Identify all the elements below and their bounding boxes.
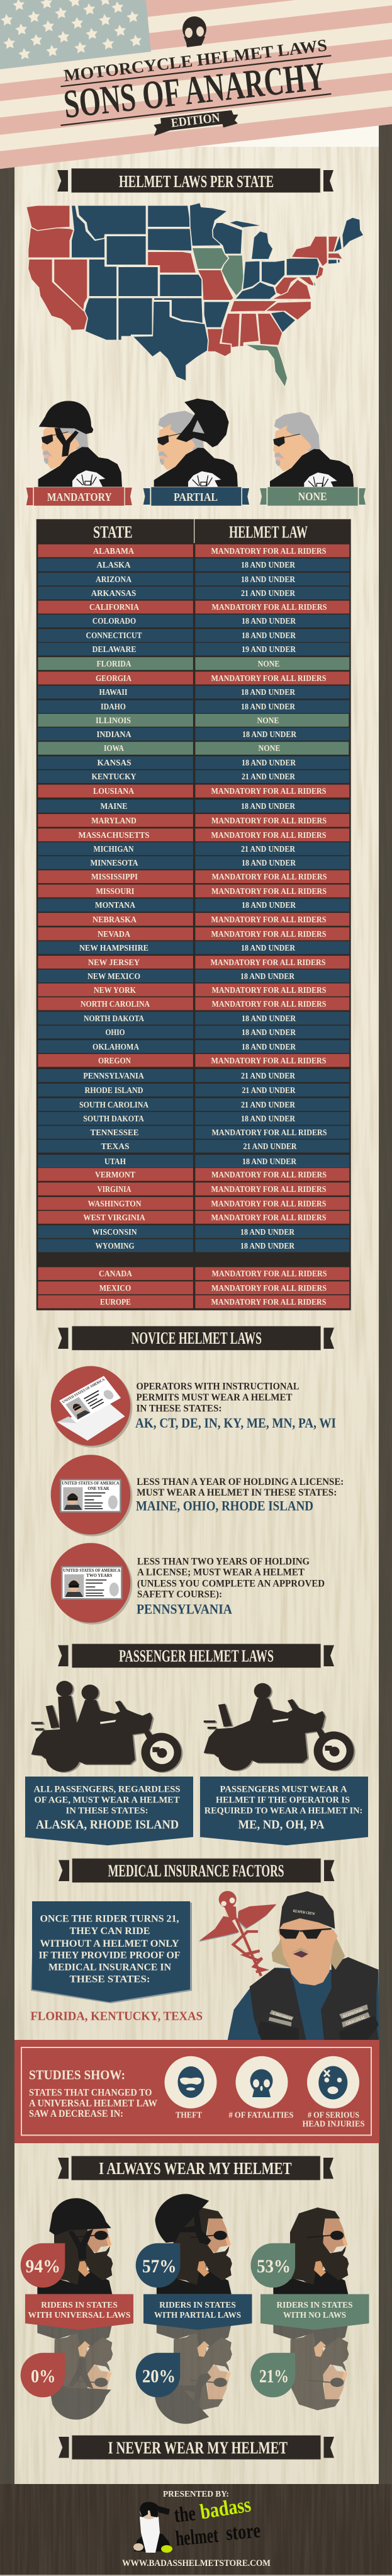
row: Florida	[38, 657, 349, 670]
panel: studies show: HEAD INJURIES	[302, 2119, 365, 2129]
text: instructional permits	[135, 1382, 336, 1431]
row: Indiana	[38, 728, 349, 741]
row: New York: NEW YORK	[94, 985, 136, 995]
row: Montana: MONTANA	[95, 900, 135, 910]
title: MOTORCYCLE HELMET LAWS	[63, 35, 328, 85]
circle: two year license card	[51, 1543, 132, 1625]
row: Arizona: ARIZONA	[96, 575, 132, 584]
row: Mississippi: MISSISSIPPI	[91, 872, 138, 881]
text: less than a year: MAINE, OHIO, RHODE ISLAND	[136, 1498, 313, 1514]
callout: medical insurance: THEY CAN RIDE	[69, 1926, 150, 1937]
row: North Carolina: NORTH CAROLINA	[81, 999, 150, 1009]
row: New Hampshire: NEW HAMPSHIRE	[79, 943, 148, 953]
figure: biker with cap and vest	[228, 1891, 379, 2040]
logo: the badass helmet store: store	[225, 2519, 261, 2545]
row: Vermont	[38, 1168, 349, 1181]
row: Georgia: MANDATORY FOR ALL RIDERS	[211, 673, 326, 683]
row: Oklahoma	[38, 1040, 349, 1053]
stat: 21%	[250, 2353, 295, 2397]
banner: helmet laws per state	[57, 168, 333, 193]
table frame and header	[36, 519, 351, 1310]
row: Indiana: INDIANA	[97, 730, 132, 739]
row: Idaho: IDAHO	[101, 702, 126, 711]
logo: the badass helmet store	[133, 2493, 261, 2553]
row: Kansas: KANSAS	[97, 758, 131, 767]
figure: biker with cap and vest: V. PRESIDENT	[272, 2012, 293, 2022]
row: Illinois: NONE	[257, 716, 279, 725]
row: Maine: MAINE	[101, 801, 127, 811]
circle: one year license card	[51, 1455, 132, 1537]
row: Oregon: OREGON	[98, 1056, 131, 1065]
row: Kansas	[38, 756, 349, 769]
row: Rhode Island: 21 AND UNDER	[242, 1085, 296, 1095]
banner: i never wear my helmet	[59, 2436, 334, 2459]
banner: medical insurance factors	[59, 1858, 335, 1882]
ribbon: none: NONE	[298, 490, 327, 503]
row: New Jersey	[38, 956, 349, 969]
row: Rhode Island: RHODE ISLAND	[84, 1085, 143, 1095]
row: Washington: MANDATORY FOR ALL RIDERS	[211, 1199, 326, 1208]
row: Colorado: 18 AND UNDER	[242, 616, 296, 626]
row: Iowa: NONE	[258, 743, 281, 753]
callout: medical insurance: ONCE THE RIDER TURNS 21,	[40, 1914, 179, 1925]
callout: operator required: REQUIRED TO WEAR A HELMET IN:	[204, 1806, 362, 1816]
ribbon: riders in states with no laws: WITH NO LAWS	[283, 2311, 346, 2320]
text: less than two years	[137, 1556, 325, 1617]
callout: operator required: HELMET IF THE OPERATOR IS	[216, 1795, 350, 1805]
stat: 94%	[21, 2243, 65, 2287]
row: Pennsylvania	[38, 1069, 349, 1082]
row: Maine: 18 AND UNDER	[241, 801, 295, 811]
callout: operator required: PASSENGERS MUST WEAR A	[220, 1784, 347, 1794]
stat: 53%: 53%	[257, 2256, 291, 2277]
row: Colorado	[38, 615, 349, 627]
banner: helmet laws per state: HELMET LAWS PER STATE	[119, 172, 274, 191]
panel: studies show: STATES THAT CHANGED TO	[29, 2088, 152, 2098]
row: Illinois	[38, 714, 349, 727]
text: less than two years: LESS THAN TWO YEARS OF HOLDING	[137, 1556, 310, 1567]
callout: all passengers: OF AGE, MUST WEAR A HELMET	[34, 1795, 180, 1805]
icon: motorcycle with passenger	[31, 1681, 182, 1773]
row: Wyoming: 18 AND UNDER	[240, 1241, 294, 1251]
row: Tennessee: TENNESSEE	[91, 1128, 138, 1137]
logo: the badass helmet store: helmet	[174, 2524, 220, 2551]
row: Oklahoma: 18 AND UNDER	[242, 1042, 296, 1051]
ribbon: riders in states with universal laws: RIDERS IN STATES	[41, 2301, 118, 2310]
row: Florida: NONE	[258, 659, 279, 668]
row: Mexico	[38, 1281, 349, 1294]
text: less than a year: MUST WEAR A HELMET IN THESE STATES:	[137, 1487, 337, 1498]
row: Minnesota	[38, 856, 349, 869]
row: Canada	[38, 1268, 349, 1280]
row: Pennsylvania: PENNSYLVANIA	[83, 1071, 144, 1080]
ribbon: riders in states with no laws	[260, 2294, 369, 2330]
icon: head injury face	[307, 2056, 359, 2109]
edition ribbon: EDITION	[171, 111, 221, 130]
circle: instructional permit card: UNITED STATES OF AMERICA	[62, 1378, 106, 1404]
table frame and header: HELMET LAW	[229, 522, 308, 541]
row: Vermont: MANDATORY FOR ALL RIDERS	[211, 1170, 327, 1179]
icon: winged skull caduceus	[199, 1891, 276, 1976]
row: Utah: UTAH	[104, 1157, 126, 1166]
ribbon: none	[260, 487, 366, 506]
row: Delaware: 19 AND UNDER	[242, 644, 296, 654]
circle: two year license card: TWO YEARS	[86, 1573, 112, 1578]
row: Alabama	[38, 544, 349, 557]
banner: i never wear my helmet: I NEVER WEAR MY HELMET	[108, 2438, 288, 2457]
stat: 21%: 21%	[259, 2366, 289, 2387]
header flag	[0, 0, 392, 169]
row: South Dakota: SOUTH DAKOTA	[83, 1114, 144, 1123]
banner: medical insurance factors: MEDICAL INSURANCE FACTORS	[108, 1861, 284, 1880]
circle: one year license card: UNITED STATES OF AMERICA	[62, 1481, 119, 1486]
figure: biker with cap and vest: ORIGINAL	[345, 2015, 367, 2027]
row: Oregon	[38, 1054, 349, 1067]
text: instructional permits: AK, CT, DE, IN, KY, ME, MN, PA, WI	[135, 1415, 336, 1431]
row: Wisconsin: WISCONSIN	[92, 1227, 137, 1237]
row: New York: MANDATORY FOR ALL RIDERS	[211, 985, 326, 995]
row: Georgia: GEORGIA	[96, 673, 132, 683]
panel: studies show: THEFT	[176, 2110, 202, 2120]
row: Connecticut	[38, 629, 349, 642]
row: West Virginia: WEST VIRGINIA	[83, 1213, 145, 1222]
row: Delaware	[38, 643, 349, 655]
row: Wisconsin	[38, 1225, 349, 1239]
panel: studies show: SAW A DECREASE IN:	[29, 2109, 123, 2119]
row: Arkansas: 21 AND UNDER	[241, 588, 295, 598]
ribbon: mandatory: MANDATORY	[47, 491, 112, 503]
row: Georgia	[38, 672, 349, 684]
row: New York	[38, 983, 349, 997]
row: Colorado: COLORADO	[92, 616, 136, 626]
callout: all passengers	[23, 1777, 193, 1845]
row: Arkansas: ARKANSAS	[91, 588, 136, 598]
banner: i always wear my helmet	[58, 2156, 333, 2180]
callout: all passengers: ALASKA, RHODE ISLAND	[36, 1818, 179, 1832]
row: Kentucky	[38, 770, 349, 783]
circle: one year license card: ONE YEAR	[87, 1486, 109, 1491]
row: Ohio: 18 AND UNDER	[242, 1028, 296, 1037]
figure: rider with partial law helmet	[155, 2194, 232, 2294]
reflections: riders who never wear a helmet	[37, 2323, 349, 2424]
ribbon: riders in states with partial laws: RIDERS IN STATES	[159, 2301, 236, 2310]
text: instructional permits: PERMITS MUST WEAR A HELMET	[136, 1392, 293, 1403]
row: Hawaii: HAWAII	[99, 687, 127, 697]
banner: passenger helmet laws	[58, 1644, 334, 1668]
row: Virginia: MANDATORY FOR ALL RIDERS	[211, 1184, 326, 1194]
text: less than a year	[136, 1477, 344, 1514]
row: Iowa	[38, 742, 349, 755]
row: Nevada	[38, 927, 349, 940]
edition ribbon	[154, 110, 238, 136]
row: New Jersey: NEW JERSEY	[88, 958, 140, 967]
circle: instructional permit card	[51, 1366, 132, 1448]
row: Massachusetts	[38, 828, 349, 842]
row: California: CALIFORNIA	[89, 602, 139, 612]
icon: bearded mascot	[133, 2502, 172, 2553]
stat: 57%: 57%	[142, 2256, 176, 2277]
row: Rhode Island	[38, 1084, 349, 1096]
row: Virginia	[38, 1182, 349, 1196]
text: instructional permits: IN THESE STATES:	[136, 1404, 221, 1414]
row: North Dakota: NORTH DAKOTA	[84, 1014, 144, 1023]
row: Wisconsin: 18 AND UNDER	[240, 1227, 294, 1237]
row: Oklahoma: OKLAHOMA	[92, 1042, 139, 1051]
row: Virginia: VIRGINIA	[97, 1184, 132, 1194]
row: Lousiana	[38, 785, 349, 798]
row: California	[38, 601, 349, 614]
banner: novice helmet laws	[58, 1326, 334, 1350]
icon: skull	[182, 16, 206, 47]
row: Florida: FLORIDA	[97, 659, 132, 668]
row: Mississippi: MANDATORY FOR ALL RIDERS	[211, 872, 327, 881]
text: less than a year: LESS THAN A YEAR OF HOLDING A LICENSE:	[137, 1477, 344, 1487]
callout: medical insurance: THESE STATES:	[69, 1974, 150, 1985]
row: South Dakota: 18 AND UNDER	[241, 1114, 295, 1123]
row: Mississippi	[38, 871, 349, 883]
callout: all passengers: IN THESE STATES:	[65, 1806, 148, 1816]
row: Nebraska: MANDATORY FOR ALL RIDERS	[211, 915, 326, 924]
banner: i always wear my helmet: I ALWAYS WEAR MY HELMET	[99, 2159, 292, 2178]
row: New Mexico: NEW MEXICO	[87, 971, 140, 981]
row: South Carolina: 21 AND UNDER	[241, 1100, 295, 1109]
callout: medical insurance: MEDICAL INSURANCE IN	[48, 1962, 171, 1973]
row: Massachusetts: MANDATORY FOR ALL RIDERS	[211, 830, 326, 840]
row: North Dakota: 18 AND UNDER	[242, 1014, 296, 1023]
callout: medical insurance: WITHOUT A HELMET ONLY	[40, 1938, 179, 1949]
row: Wyoming: WYOMING	[96, 1241, 135, 1251]
stat: 20%	[136, 2353, 180, 2397]
panel: studies show: # OF SERIOUS	[308, 2110, 359, 2120]
ribbon: mandatory	[26, 487, 132, 506]
ribbon: riders in states with universal laws	[25, 2294, 133, 2330]
row: North Dakota	[38, 1012, 349, 1024]
text: less than two years: A LICENSE; MUST WEAR A HELMET	[137, 1567, 305, 1578]
row: Missouri: MANDATORY FOR ALL RIDERS	[211, 886, 327, 896]
figure: biker with mandatory helmet	[38, 401, 122, 487]
row: Missouri	[38, 884, 349, 897]
row: New Mexico: 18 AND UNDER	[240, 971, 294, 981]
row: Washington: WASHINGTON	[88, 1199, 142, 1208]
row: Hawaii	[38, 685, 349, 699]
row: Hawaii: 18 AND UNDER	[241, 687, 295, 697]
row: Minnesota: 18 AND UNDER	[242, 858, 296, 867]
figure: biker with partial helmet	[154, 399, 238, 488]
row: Europe: EUROPE	[100, 1297, 131, 1307]
text: less than two years: PENNSYLVANIA	[137, 1601, 232, 1617]
row: Wyoming	[38, 1239, 349, 1252]
row: Illinois: ILLINOIS	[96, 716, 131, 725]
logo: the badass helmet store: badass	[198, 2493, 252, 2524]
row: Utah	[38, 1155, 349, 1168]
row: Montana	[38, 898, 349, 912]
figure: biker with no helmet	[270, 412, 354, 489]
row: Lousiana: LOUSIANA	[93, 786, 134, 796]
row: Minnesota: MINNESOTA	[91, 858, 138, 867]
stat: 53%	[250, 2243, 295, 2287]
row: Mexico: MANDATORY FOR ALL RIDERS	[211, 1283, 327, 1293]
icon: fatalities skull	[235, 2056, 288, 2109]
stat: 0%	[21, 2353, 65, 2397]
text: less than two years: SAFETY COURSE):	[137, 1589, 222, 1600]
logo: the badass helmet store: the	[173, 2502, 197, 2527]
row: North Carolina	[38, 997, 349, 1010]
callout: operator required	[200, 1777, 368, 1845]
figure: biker with cap and vest: REAPER CREW	[293, 1909, 315, 1916]
row: Maryland	[38, 814, 349, 827]
row: West Virginia	[38, 1211, 349, 1223]
row: Alaska: ALASKA	[97, 560, 131, 570]
row: Tennessee: MANDATORY FOR ALL RIDERS	[211, 1128, 327, 1137]
table rows	[38, 544, 349, 1308]
row: South Dakota	[38, 1112, 349, 1125]
row: Idaho: 18 AND UNDER	[241, 702, 295, 711]
banner: novice helmet laws: NOVICE HELMET LAWS	[132, 1329, 262, 1348]
row: Pennsylvania: 21 AND UNDER	[241, 1071, 295, 1080]
row: Nebraska: NEBRASKA	[92, 915, 137, 924]
row: South Carolina	[38, 1098, 349, 1111]
row: New Hampshire: 18 AND UNDER	[241, 943, 295, 953]
row: Connecticut: 18 AND UNDER	[242, 631, 296, 640]
row: West Virginia: MANDATORY FOR ALL RIDERS	[211, 1213, 326, 1222]
text: insurance states: FLORIDA, KENTUCKY, TEXAS	[30, 2010, 203, 2024]
row: North Carolina: MANDATORY FOR ALL RIDERS	[211, 999, 326, 1009]
row: Nevada: NEVADA	[98, 929, 130, 939]
table frame and header: STATE	[93, 522, 133, 541]
row: Michigan: MICHIGAN	[93, 844, 134, 854]
row: California: MANDATORY FOR ALL RIDERS	[211, 602, 327, 612]
banner: passenger helmet laws: PASSENGER HELMET LAWS	[119, 1647, 274, 1666]
ribbon: riders in states with partial laws: WITH PARTIAL LAWS	[154, 2311, 241, 2320]
map: US states by helmet law	[26, 203, 364, 387]
circle: two year license card: UNITED STATES OF AMERICA	[63, 1568, 120, 1573]
row: South Carolina: SOUTH CAROLINA	[79, 1100, 148, 1109]
row: Vermont: VERMONT	[95, 1170, 135, 1179]
row: Europe	[38, 1295, 349, 1308]
ribbon: partial: PARTIAL	[174, 491, 218, 503]
figure: rider with no helmet	[273, 2207, 349, 2294]
figure: rider with universal law helmet	[37, 2198, 113, 2294]
row: Canada: CANADA	[99, 1269, 132, 1278]
row: Connecticut: CONNECTICUT	[86, 631, 142, 640]
text: instructional permits: OPERATORS WITH INSTRUCTIONAL	[136, 1382, 300, 1392]
row: Kentucky: 21 AND UNDER	[242, 772, 295, 781]
row: Utah: 18 AND UNDER	[242, 1157, 296, 1166]
row: Texas: 21 AND UNDER	[243, 1142, 297, 1151]
panel: studies show: A UNIVERSAL HELMET LAW	[29, 2098, 157, 2109]
row: Arizona: 18 AND UNDER	[241, 575, 295, 584]
icon: theft mask	[165, 2056, 216, 2109]
stat: 20%: 20%	[142, 2366, 176, 2387]
row: Europe: MANDATORY FOR ALL RIDERS	[211, 1297, 326, 1307]
row: Delaware: DELAWARE	[92, 644, 136, 654]
stat: 0%: 0%	[31, 2366, 55, 2387]
row: Oregon: MANDATORY FOR ALL RIDERS	[211, 1056, 326, 1065]
callout: operator required: ME, ND, OH, PA	[238, 1818, 325, 1832]
text: less than two years: (UNLESS YOU COMPLETE AN APPROVED	[137, 1579, 325, 1589]
stat: 94%: 94%	[25, 2256, 60, 2277]
row: Montana: 18 AND UNDER	[242, 900, 296, 910]
row: Alabama: MANDATORY FOR ALL RIDERS	[211, 546, 326, 556]
panel: studies show: STUDIES SHOW:	[29, 2068, 125, 2083]
row: Washington	[38, 1197, 349, 1210]
row: Kansas: 18 AND UNDER	[242, 758, 296, 767]
row: Alaska	[38, 558, 349, 571]
row: New Hampshire	[38, 941, 349, 954]
panel: studies show: # OF FATALITIES	[229, 2110, 293, 2120]
row: Michigan	[38, 842, 349, 856]
row: Arizona	[38, 573, 349, 586]
row: Maryland: MANDATORY FOR ALL RIDERS	[211, 816, 327, 825]
row: Nevada: MANDATORY FOR ALL RIDERS	[211, 929, 326, 939]
row: Lousiana: MANDATORY FOR ALL RIDERS	[211, 786, 326, 796]
row: Alabama: ALABAMA	[93, 546, 134, 556]
ribbon: riders in states with no laws: RIDERS IN STATES	[277, 2301, 353, 2310]
row: Arkansas	[38, 587, 349, 600]
ribbon: riders in states with universal laws: WITH UNIVERSAL LAWS	[28, 2311, 131, 2320]
row: New Jersey: MANDATORY FOR ALL RIDERS	[210, 958, 326, 967]
row: Nebraska	[38, 913, 349, 926]
row: Tennessee	[38, 1126, 349, 1139]
text: presented by: PRESENTED BY:	[163, 2490, 229, 2499]
text: website: WWW.BADASSHELMETSTORE.COM	[122, 2558, 271, 2568]
row: Alaska: 18 AND UNDER	[241, 560, 295, 570]
row: Texas: TEXAS	[101, 1142, 130, 1151]
row: Michigan: 21 AND UNDER	[241, 844, 295, 854]
row: Idaho	[38, 701, 349, 713]
icon: motorcycle without passenger	[204, 1683, 356, 1772]
ribbon: partial	[143, 487, 249, 506]
row: Canada: MANDATORY FOR ALL RIDERS	[211, 1269, 327, 1278]
row: Kentucky: KENTUCKY	[92, 772, 137, 781]
row: Missouri: MISSOURI	[96, 886, 135, 896]
row: Maryland: MARYLAND	[91, 816, 137, 825]
stat: 57%	[136, 2243, 180, 2287]
row: Mexico: MEXICO	[99, 1283, 131, 1293]
row: Maine	[38, 800, 349, 813]
row: Indiana: 18 AND UNDER	[242, 730, 296, 739]
row: Iowa: IOWA	[104, 743, 124, 753]
figure: biker with cap and vest: REDWOOD	[342, 2008, 364, 2019]
row: Ohio	[38, 1026, 349, 1038]
callout: medical insurance: IF THEY PROVIDE PROOF OF	[39, 1950, 181, 1961]
callout: medical insurance	[31, 1901, 192, 2003]
row: Ohio: OHIO	[106, 1028, 125, 1037]
panel: studies show	[14, 2040, 379, 2143]
callout: all passengers: ALL PASSENGERS, REGARDLESS	[34, 1784, 180, 1794]
row: New Mexico	[38, 970, 349, 983]
row: Massachusetts: MASSACHUSETTS	[78, 830, 150, 840]
row: Texas	[38, 1140, 349, 1153]
ribbon: riders in states with partial laws	[143, 2294, 252, 2330]
